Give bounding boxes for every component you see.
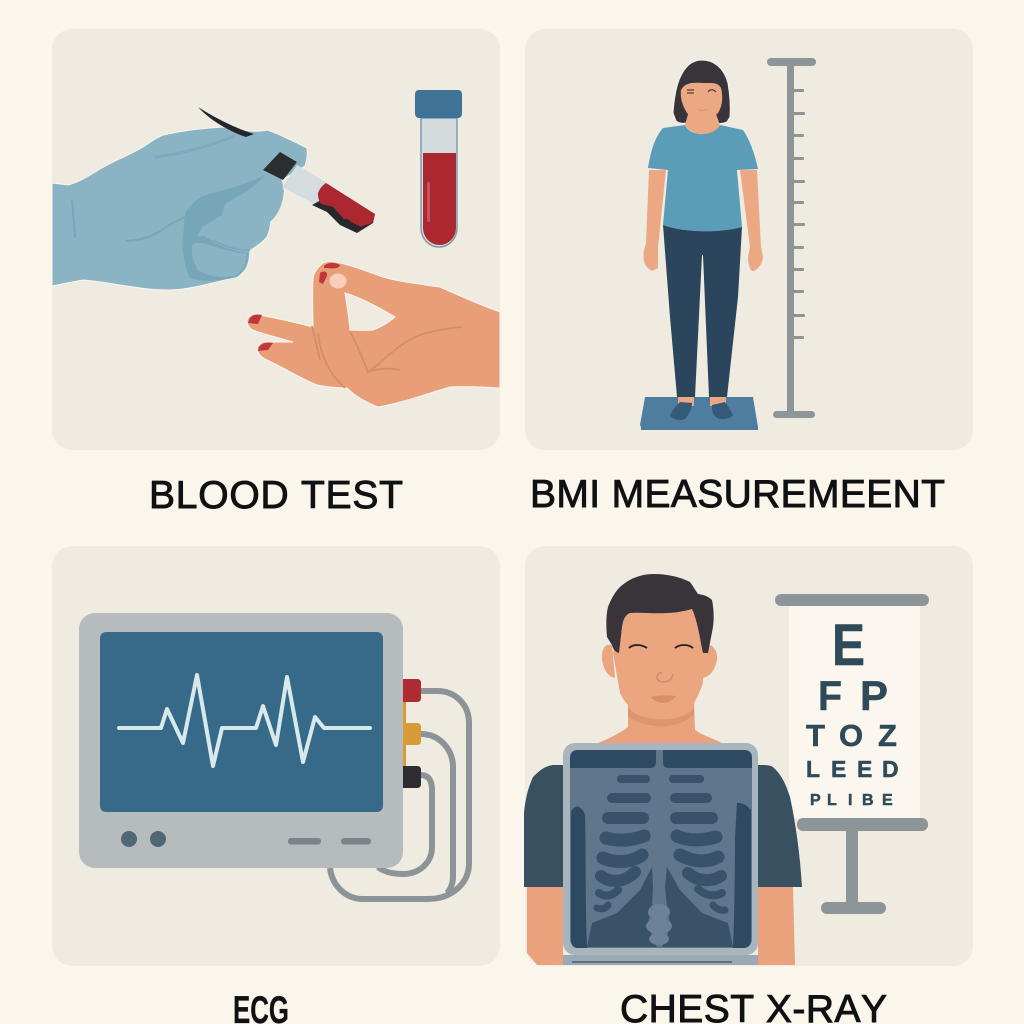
eye chart: B: [862, 792, 874, 809]
eye chart: P: [810, 792, 821, 809]
icon: man: [524, 574, 802, 965]
x-ray top band: [570, 750, 752, 768]
panel: chest x-ray and eye chart: [524, 546, 973, 966]
eye chart: F: [818, 672, 842, 719]
icon: lancet device: [263, 152, 375, 233]
x-ray ribs: [597, 779, 725, 910]
eye chart: Z: [878, 718, 897, 753]
icon: floor scale: [640, 397, 758, 430]
eye chart: O: [839, 718, 863, 753]
eye chart: T: [806, 718, 825, 753]
heading: BMI measurement: BMI MEASUREMEENT: [530, 473, 945, 516]
icon: height ruler: [767, 58, 816, 418]
panel: ECG: [52, 546, 500, 966]
icon: lancet needle: [198, 107, 254, 137]
eye chart: [789, 606, 920, 818]
heading: blood test: BLOOD TEST: [149, 474, 403, 517]
eye chart: P: [860, 672, 888, 719]
icon: gloved hand: [52, 127, 307, 290]
icon: standing woman: [643, 60, 763, 420]
eye chart: E: [831, 756, 846, 782]
eye chart: E: [882, 792, 893, 809]
icon: bare hand with finger prick: [247, 262, 500, 407]
icon: monitor buttons: [121, 831, 371, 847]
eye chart: L: [827, 792, 837, 809]
chart: ECG waveform: [119, 675, 370, 766]
panel: BMI measurement: [525, 29, 973, 450]
icon: blood test tube: [415, 90, 462, 247]
eye chart: D: [882, 756, 899, 782]
icon: eye chart stand: [775, 594, 929, 914]
eye chart: L: [806, 756, 820, 782]
eye chart: E: [832, 613, 865, 678]
icon: ECG cables: [330, 691, 469, 899]
eye chart: I: [848, 792, 852, 809]
icon: connector ports: [403, 679, 421, 788]
x-ray lungs: [571, 803, 751, 948]
icon: ECG monitor: [79, 613, 403, 868]
panel: blood test: [52, 29, 500, 450]
icon: x-ray panel: [563, 743, 758, 965]
x-ray spine: [646, 904, 672, 945]
eye chart: E: [857, 756, 872, 782]
